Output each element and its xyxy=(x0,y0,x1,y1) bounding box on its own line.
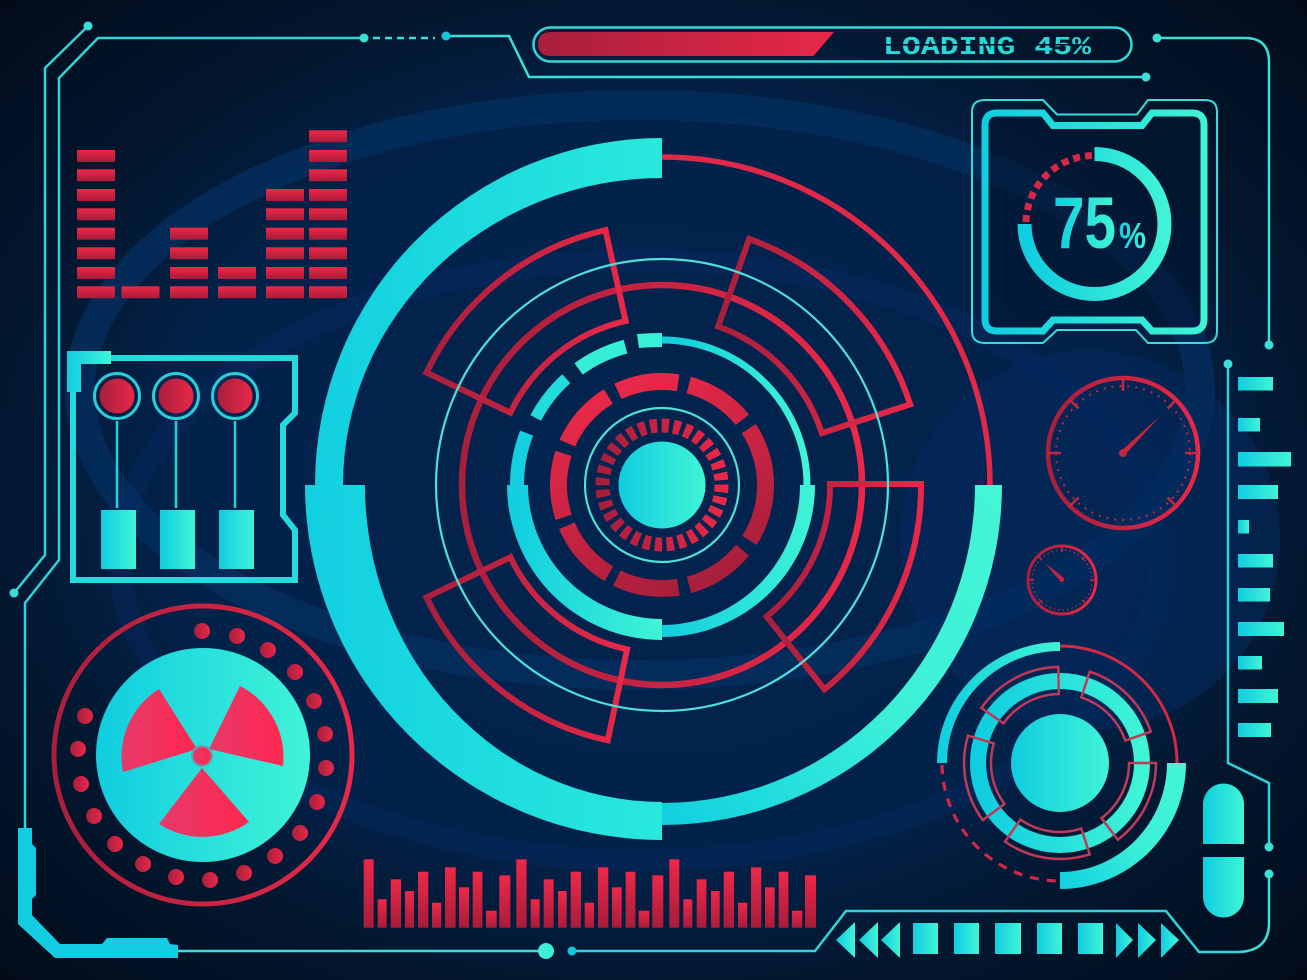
red tick ring xyxy=(602,426,722,544)
outer arcs xyxy=(305,138,1002,840)
main radial dial xyxy=(305,138,1002,840)
large gauge xyxy=(1048,378,1198,528)
right level bars xyxy=(1238,377,1291,737)
value label: % xyxy=(1119,215,1146,256)
center disc xyxy=(618,442,706,528)
value label: 75 xyxy=(1053,183,1116,264)
loading progress bar xyxy=(534,28,1132,62)
icon: radiation trefoil xyxy=(122,686,283,837)
bottom right radial dial xyxy=(937,642,1186,889)
bottom arrow strip xyxy=(836,922,1179,958)
red sector frames xyxy=(426,230,921,740)
capsule indicator xyxy=(1203,783,1244,917)
dots ring xyxy=(70,623,334,888)
needle xyxy=(1119,416,1160,457)
panel: control switches xyxy=(67,351,295,580)
needle xyxy=(1045,563,1064,582)
red ring and thin ring xyxy=(462,285,862,685)
corner bracket: bottom left xyxy=(18,828,178,958)
small gauge xyxy=(1028,546,1096,614)
cyan middle ring xyxy=(507,333,815,640)
red segmented ring xyxy=(524,347,800,623)
equalizer bar chart xyxy=(77,130,347,298)
sector frames xyxy=(964,667,1156,859)
bottom frequency bar chart xyxy=(364,859,816,928)
thin inner ring xyxy=(585,408,739,562)
panel: 75 percent donut xyxy=(972,100,1217,343)
radiation gauge xyxy=(54,606,352,904)
loading label: LOADING 45% xyxy=(883,32,1091,62)
donut arc xyxy=(1024,154,1165,294)
